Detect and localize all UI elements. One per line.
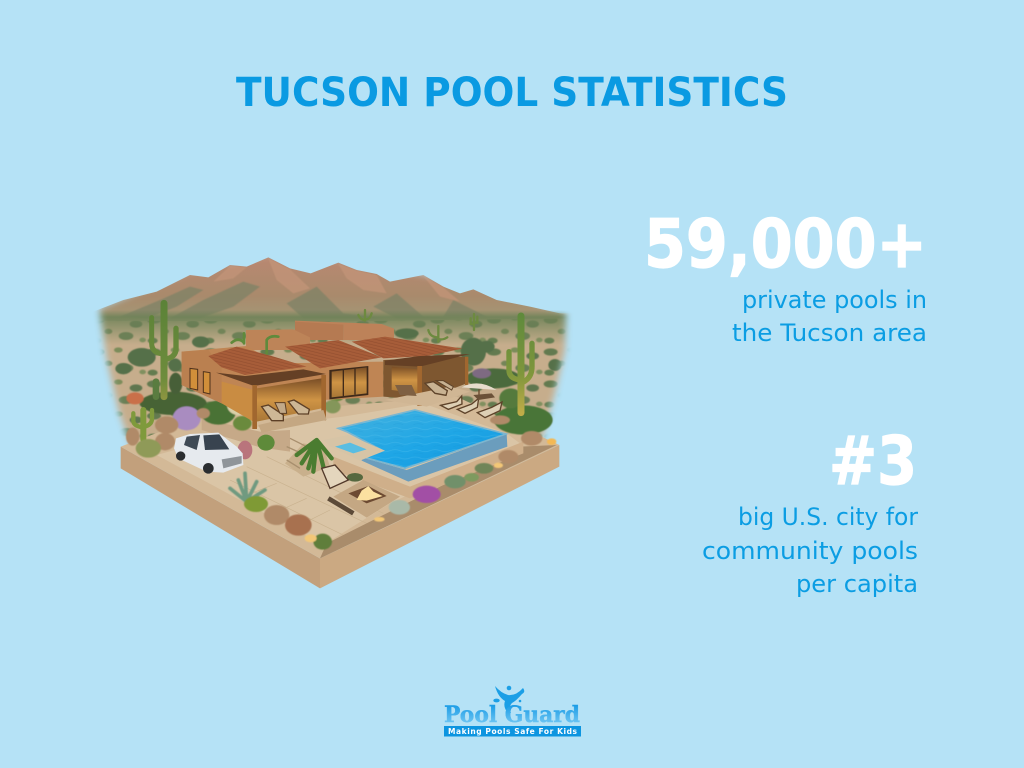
spa <box>323 435 385 461</box>
mountain shadow facets <box>120 282 487 318</box>
terracotta roofs <box>208 347 307 375</box>
stat: 59,000+ <box>644 205 927 347</box>
fire pit and chair <box>322 465 400 518</box>
retaining wall under house <box>202 418 290 452</box>
covered patio right <box>383 357 467 400</box>
mountain lit faces <box>213 258 460 302</box>
pool outer walls <box>362 434 507 482</box>
plinth right side <box>320 445 559 588</box>
planter strip on right edge <box>320 445 557 558</box>
stat description: community pools <box>702 537 918 565</box>
large desert shrubs <box>115 328 562 374</box>
rocks <box>126 408 542 525</box>
pergola roofs <box>216 369 326 386</box>
plinth top <box>121 397 559 558</box>
stat description: big U.S. city for <box>738 503 918 531</box>
stat: #3 <box>702 422 918 598</box>
pool water <box>338 410 506 468</box>
stat number: #3 <box>829 422 917 500</box>
stat number: 59,000+ <box>644 205 927 283</box>
side windows <box>190 368 198 390</box>
scrub bushes <box>100 318 569 438</box>
stat description: per capita <box>796 570 918 598</box>
horizon vegetation <box>98 310 570 342</box>
water ripples <box>338 410 506 468</box>
distant cacti <box>358 310 477 342</box>
garden shrubs <box>126 367 553 435</box>
wordmark: Pool Guard <box>444 702 580 728</box>
mountains <box>93 257 570 322</box>
stat description <box>732 286 927 347</box>
desert landscape <box>90 257 580 453</box>
tagline: Making Pools Safe For Kids <box>448 727 578 736</box>
title: TUCSON POOL STATISTICS <box>236 70 788 116</box>
paving joints <box>230 457 383 537</box>
stat description: the Tucson area <box>732 319 927 347</box>
foreground plants <box>136 438 556 550</box>
pool <box>323 410 507 482</box>
icon: water splash <box>493 686 524 713</box>
logo: Pool Guard <box>444 686 581 736</box>
cactus: tall left saguaro <box>152 303 176 397</box>
stairs and planters <box>238 435 363 482</box>
planter wall beside pool <box>333 442 523 498</box>
porch glazing <box>222 382 253 422</box>
house walls <box>182 346 383 407</box>
cactus: small left <box>133 410 152 439</box>
posts <box>252 385 257 429</box>
stat description <box>702 503 918 598</box>
vines on house <box>232 333 278 353</box>
plinth left side <box>121 447 320 588</box>
paved courtyard <box>157 403 520 545</box>
desert ground <box>90 313 580 453</box>
house <box>182 321 470 429</box>
tagline band <box>444 726 581 736</box>
terrace and loungers <box>258 381 502 433</box>
stat description: private pools in <box>742 286 927 314</box>
upper parapets <box>295 321 394 340</box>
white SUV <box>174 433 243 474</box>
illustration: desert home with pool on a plinth <box>90 257 580 588</box>
cactus: tall right saguaro <box>509 316 532 413</box>
